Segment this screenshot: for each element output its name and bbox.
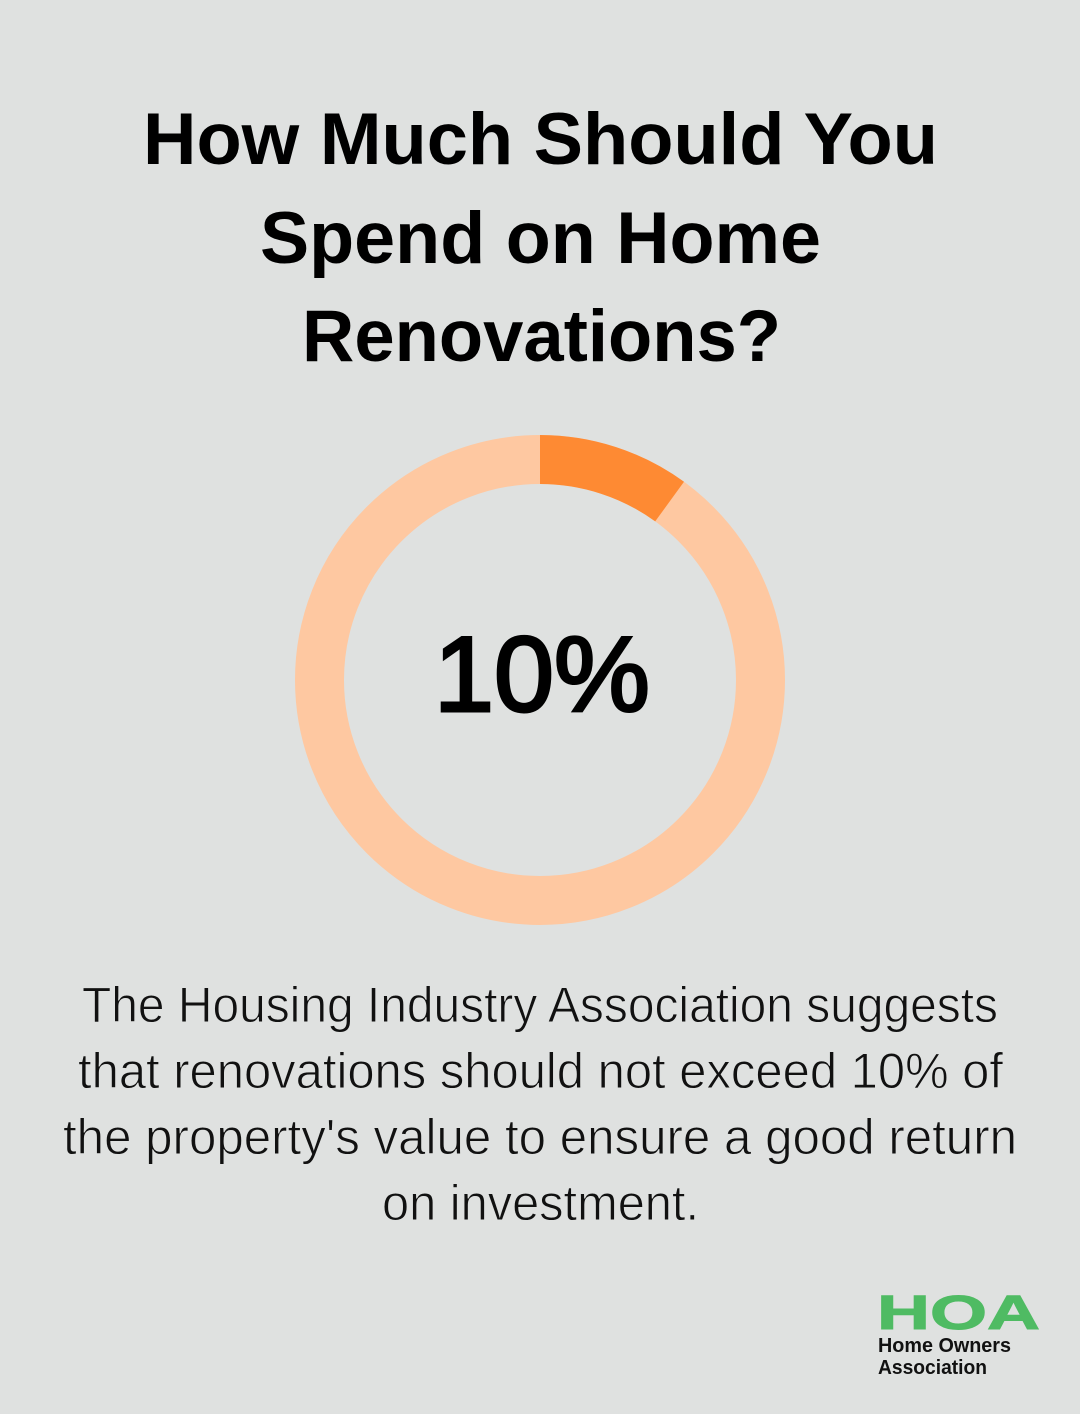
logo wordmark [878,1335,1011,1379]
donut remainder ring [320,460,760,900]
body text: the property's value to ensure a good return [63,1109,1017,1165]
logo wordmark: Home Owners [878,1335,1011,1357]
logo: Home Owners Association [877,1287,1040,1379]
donut chart: 10 percent [320,435,760,900]
body text: The Housing Industry Association suggests [82,977,998,1033]
title: Renovations? [302,296,781,377]
body text: on investment. [382,1175,699,1231]
title: How Much Should You [143,99,938,180]
title [143,99,938,377]
body text: that renovations should not exceed 10% of [78,1043,1003,1099]
body text [63,977,1017,1231]
title: Spend on Home [260,198,821,279]
logo mark HOA: HOA [877,1287,1040,1340]
donut highlighted 10 percent segment [540,435,684,521]
donut centre value: 10% [434,614,650,734]
logo wordmark: Association [878,1357,987,1379]
